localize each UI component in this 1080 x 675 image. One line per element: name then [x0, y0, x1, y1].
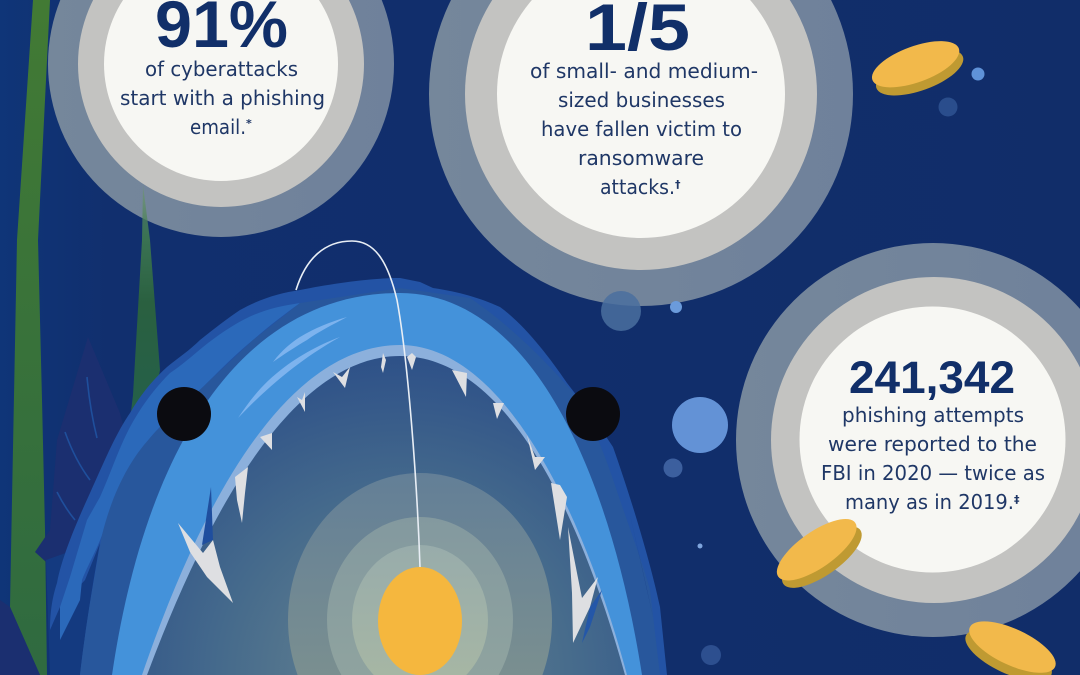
navy stripe on right flank: [630, 515, 653, 617]
description: cyberattacks: of cyberattacks: [145, 57, 298, 81]
description: FBI reports: many as in 2019.: [845, 490, 1014, 514]
outer body band: [50, 278, 667, 675]
description: ransomware: †: [675, 178, 681, 191]
stat circle: 241,342: [736, 243, 1080, 637]
dark plant bottom left: [0, 600, 40, 675]
seaweed: tall green: [10, 0, 50, 675]
bubbles: [601, 68, 984, 665]
glow rings: [288, 473, 552, 675]
description: ransomware: sized businesses: [558, 88, 725, 112]
mouth interior: [147, 356, 625, 675]
description: cyberattacks: email.: [190, 115, 246, 139]
description: cyberattacks: *: [246, 117, 252, 130]
anglerfish: [50, 241, 667, 675]
inner body shade: [80, 288, 660, 675]
description: ransomware: of small- and medium-: [530, 59, 758, 83]
lure bulb: [378, 567, 462, 675]
teeth: [178, 353, 602, 643]
coin bottom right: [958, 611, 1063, 675]
mid body band: [60, 303, 300, 640]
coin middle: [768, 508, 871, 599]
dark leaf plant: [35, 337, 130, 562]
coin top right: [866, 31, 969, 105]
description: FBI reports: were reported to the: [828, 432, 1037, 456]
water behind fish tail: [46, 540, 102, 675]
description: cyberattacks: start with a phishing: [120, 86, 325, 110]
description: FBI reports: phishing attempts: [842, 403, 1024, 427]
description: ransomware: ransomware: [578, 146, 704, 170]
description: ransomware: attacks.: [600, 175, 675, 199]
seaweed: short green: [130, 185, 160, 420]
description: ransomware: have fallen victim to: [541, 117, 742, 141]
description: FBI reports: ‡: [1014, 493, 1020, 506]
lure line: [296, 241, 420, 567]
stat: 241,342: 241,342: [849, 352, 1015, 403]
stat circle: 1/5: [429, 0, 853, 306]
description: cyberattacks: [120, 57, 325, 139]
bright blue band: [112, 293, 642, 675]
eyes: [157, 387, 620, 441]
highlight streaks: [238, 317, 347, 418]
pale mouth rim: [142, 345, 627, 675]
description: FBI reports: FBI in 2020 — twice as: [821, 461, 1045, 485]
description: ransomware: [530, 59, 758, 199]
stat circle: 91 percent: [48, 0, 394, 237]
description: FBI reports: [821, 403, 1045, 514]
